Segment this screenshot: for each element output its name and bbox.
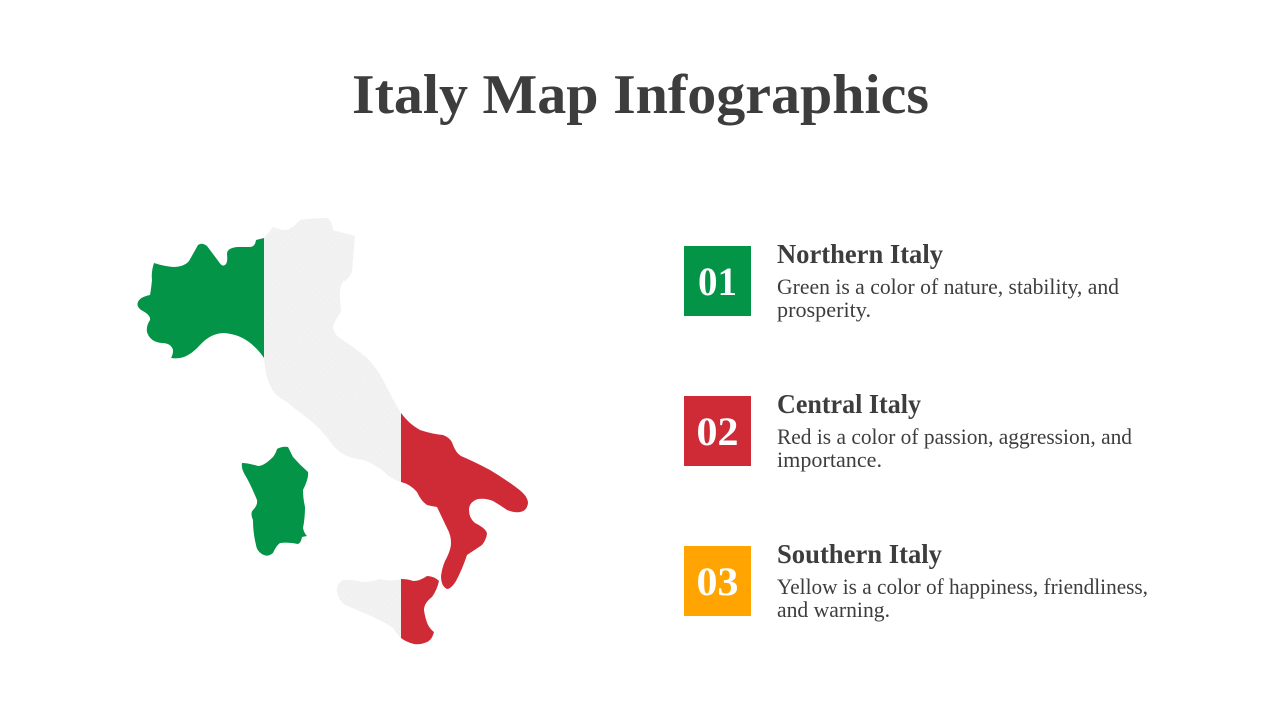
description: Southern Italy: Yellow is a color of happiness, friendliness, xyxy=(777,574,1148,599)
description: Central Italy: importance. xyxy=(777,447,882,472)
map: central region light grey xyxy=(264,218,401,482)
title: Italy Map Infographics xyxy=(352,64,929,126)
heading: Southern Italy: Southern Italy xyxy=(777,539,942,569)
item 3: Southern Italy xyxy=(684,539,1148,622)
number box 03 xyxy=(684,546,751,616)
description: Central Italy: Red is a color of passion, aggression, and xyxy=(777,424,1132,449)
number 02: 02 xyxy=(696,409,738,454)
map: Sicily red xyxy=(401,576,439,644)
description: Southern Italy: and warning. xyxy=(777,597,890,622)
heading: Northern Italy: Northern Italy xyxy=(777,239,943,269)
number box 02 xyxy=(684,396,751,466)
number box 01 xyxy=(684,246,751,316)
item 2: Central Italy xyxy=(684,389,1132,472)
description: Northern Italy: Green is a color of nature, stability, and xyxy=(777,274,1119,299)
number 03: 03 xyxy=(696,559,738,604)
map: southern region red xyxy=(401,413,528,589)
map: Sardinia green xyxy=(242,447,308,556)
map of Italy xyxy=(137,218,528,644)
heading: Central Italy: Central Italy xyxy=(777,389,921,419)
map: Sicily grey xyxy=(337,579,401,638)
item 1: Northern Italy xyxy=(684,239,1119,322)
map: northern region green xyxy=(137,238,264,358)
number 01: 01 xyxy=(698,259,737,304)
description: Northern Italy: prosperity. xyxy=(777,297,871,322)
